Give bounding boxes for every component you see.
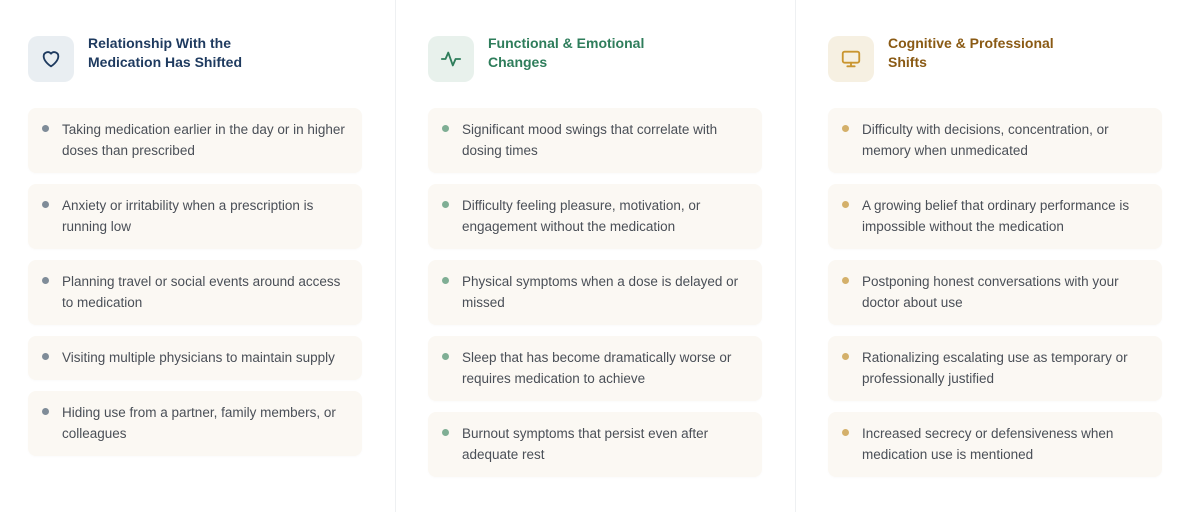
card (28, 184, 362, 249)
card (428, 260, 762, 325)
card: Significant mood swings that correlate with dosing times (462, 122, 717, 158)
card (28, 108, 362, 173)
panel: cognitive & professional (828, 35, 1162, 477)
card (28, 260, 362, 325)
title: Medication Has Shifted (88, 54, 242, 70)
card: Postponing honest conversations with your doctor about use (862, 274, 1119, 310)
title: Functional & Emotional (488, 35, 644, 51)
card: Planning travel or social events around access to medication (62, 274, 340, 310)
card (428, 108, 762, 173)
card: Sleep that has become dramatically worse or requires medication to achieve (462, 350, 731, 386)
panel: relationship with medication (0, 0, 396, 512)
card (28, 336, 362, 380)
title: Relationship With the (88, 35, 231, 51)
card: Rationalizing escalating use as temporary or professionally justified (862, 350, 1128, 386)
list: cognitive signs (828, 108, 1162, 477)
panel: functional & emotional (396, 0, 796, 512)
card: Physical symptoms when a dose is delayed or missed (462, 274, 738, 310)
card (828, 108, 1162, 173)
title: Cognitive & Professional (888, 35, 1054, 51)
card: Anxiety or irritability when a prescription is running low (62, 198, 313, 234)
card (428, 184, 762, 249)
card: Increased secrecy or defensiveness when medication use is mentioned (862, 426, 1113, 462)
card (28, 391, 362, 456)
card (428, 412, 762, 477)
card (828, 260, 1162, 325)
title: Changes (488, 54, 547, 70)
card (828, 184, 1162, 249)
card: Visiting multiple physicians to maintain supply (62, 350, 335, 365)
card (428, 336, 762, 401)
heading: cognitive (828, 35, 1054, 82)
card: Difficulty with decisions, concentration, or memory when unmedicated (862, 122, 1109, 158)
title (888, 35, 1054, 70)
card: Burnout symptoms that persist even after adequate rest (462, 426, 708, 462)
list: functional signs (428, 108, 762, 477)
card: Taking medication earlier in the day or in higher doses than prescribed (62, 122, 345, 158)
card: A growing belief that ordinary performance is impossible without the medication (862, 198, 1129, 234)
card: Hiding use from a partner, family members, or colleagues (62, 405, 336, 441)
heading: functional (428, 35, 644, 82)
heading: relationship (28, 35, 242, 82)
icon: heart (28, 36, 74, 82)
title: Shifts (888, 54, 927, 70)
title (488, 35, 644, 70)
card (828, 412, 1162, 477)
icon: pulse (428, 36, 474, 82)
card (828, 336, 1162, 401)
card: Difficulty feeling pleasure, motivation, or engagement without the medication (462, 198, 700, 234)
icon: monitor (828, 36, 874, 82)
title (88, 35, 242, 70)
list: relationship signs (28, 108, 362, 456)
